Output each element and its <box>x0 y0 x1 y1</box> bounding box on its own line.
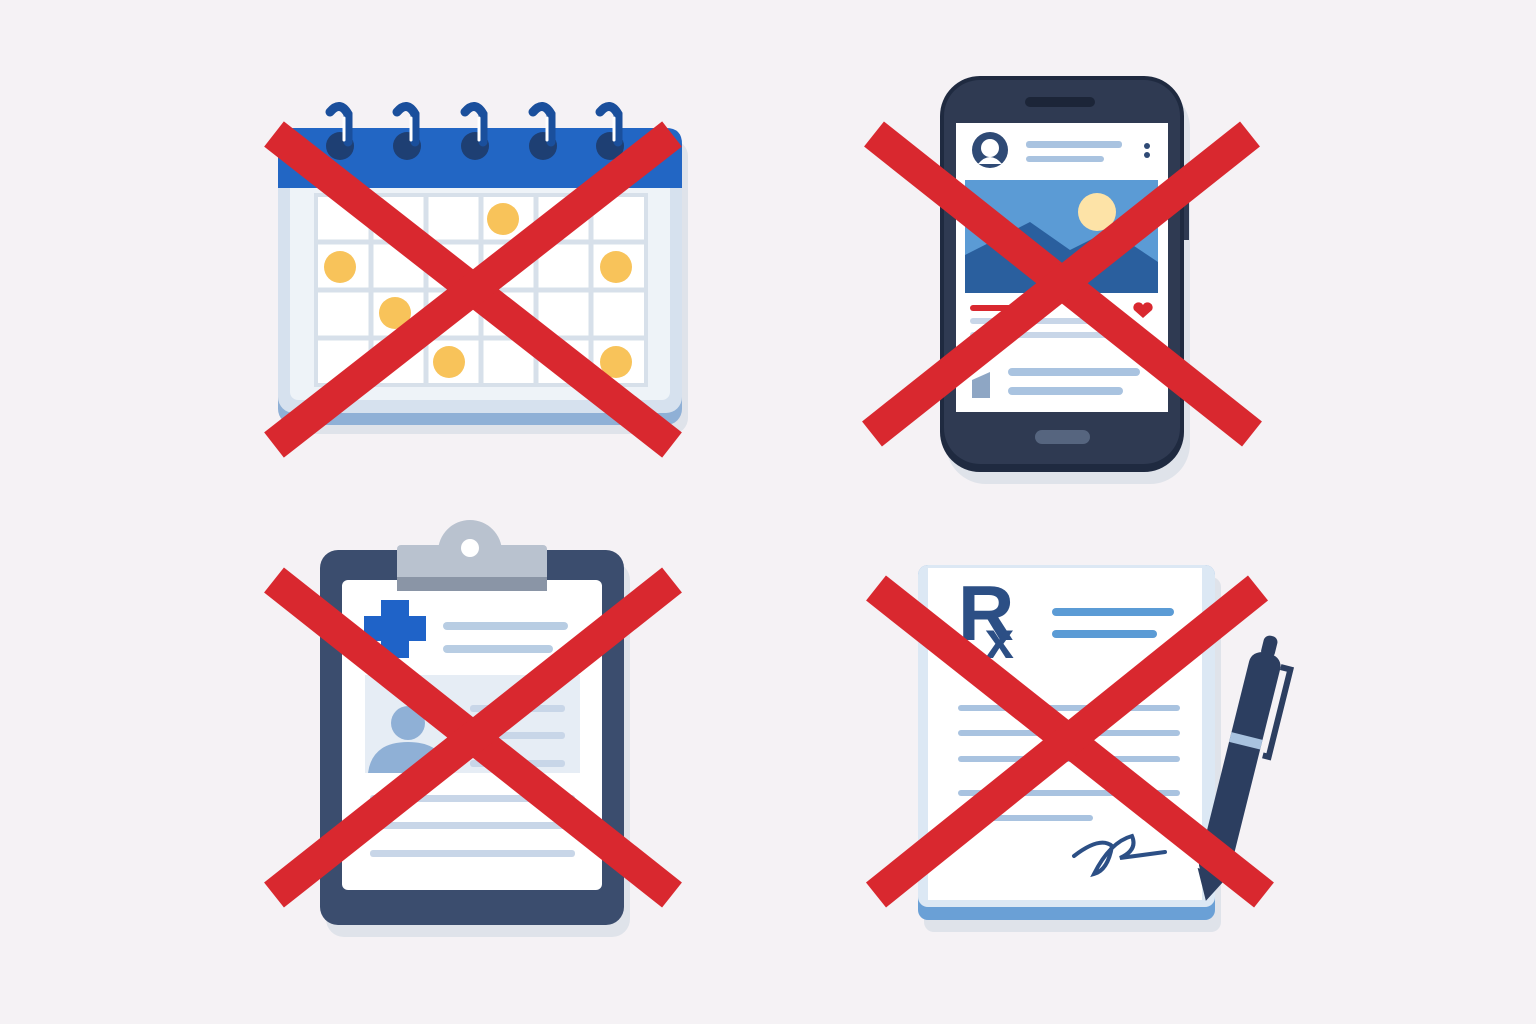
red cross: phone <box>872 134 1252 434</box>
icon: prescription with pen <box>918 565 1297 932</box>
icon: calendar <box>278 106 688 434</box>
red cross: prescription <box>876 588 1264 895</box>
icon: medical clipboard <box>320 520 630 937</box>
icon: prescription with pen: x <box>985 612 1014 670</box>
red cross: calendar <box>274 134 672 445</box>
calendar rings <box>326 106 624 160</box>
icon: prescription with pen: R <box>958 569 1014 657</box>
icon: smartphone <box>940 76 1190 484</box>
red cross: clipboard <box>274 580 672 895</box>
